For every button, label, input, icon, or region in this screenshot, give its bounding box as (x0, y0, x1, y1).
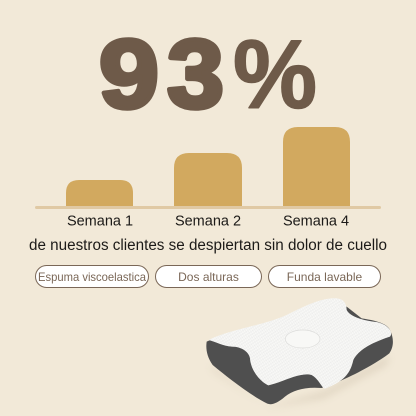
label: Semana 2: Semana 2 (175, 214, 241, 230)
pill: Dos alturas (156, 266, 262, 288)
bar: Semana 1 (66, 180, 133, 206)
pill: Funda lavable: Funda lavable (287, 270, 363, 284)
chart baseline (35, 206, 381, 209)
icon: memory foam pillow (206, 298, 393, 407)
bar chart (35, 127, 381, 230)
pill: Dos alturas: Dos alturas (178, 270, 239, 284)
pillow shadow (210, 355, 390, 407)
title: 93%: 9 (99, 20, 159, 128)
label: Semana 4: Semana 4 (283, 214, 349, 230)
bar: Semana 2 (174, 153, 242, 206)
pill: Espuma viscoelastica (36, 266, 148, 288)
label: Semana 1: Semana 1 (67, 214, 133, 230)
caption: de nuestros clientes se despiertan sin dolor de cuello (29, 237, 387, 254)
title: 93%: 3 (167, 20, 224, 128)
pill: Espuma viscoelastica: Espuma viscoelastica (38, 270, 146, 284)
title: 93% (99, 20, 317, 128)
title: 93%: % (233, 20, 317, 128)
pillow dark base (206, 307, 393, 404)
pillow centre hollow (285, 330, 320, 348)
quilted texture (209, 298, 391, 389)
pill: Funda lavable (268, 266, 380, 288)
bar: Semana 4 (283, 127, 350, 206)
pillow white top (209, 298, 391, 389)
